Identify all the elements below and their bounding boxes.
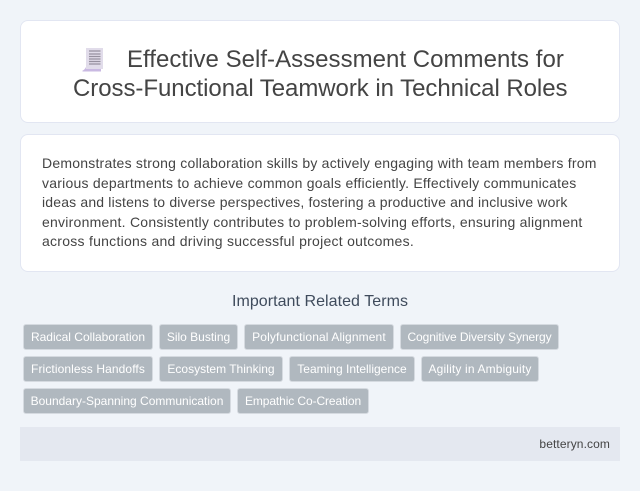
panel: description xyxy=(20,134,620,272)
tag: Ecosystem Thinking xyxy=(167,362,275,376)
tag xyxy=(23,356,153,382)
description text: various departments to achieve common goals efficiently. Effectively communicates xyxy=(42,174,577,190)
description text: Demonstrates strong collaboration skills by actively engaging with team members from xyxy=(42,155,597,171)
tag xyxy=(159,356,283,382)
description text: ideas and listens to diverse perspectives, fostering a productive and inclusive work xyxy=(42,194,568,210)
description text: across functions and driving successful project outcomes. xyxy=(42,233,414,249)
tag xyxy=(421,356,539,382)
tag: Agility in Ambiguity xyxy=(428,362,532,376)
heading: related terms: Important Related Terms xyxy=(232,293,408,310)
tag xyxy=(400,324,559,350)
tag: Boundary-Spanning Communication xyxy=(31,394,223,408)
tag: Radical Collaboration xyxy=(31,330,145,344)
tag: Empathic Co-Creation xyxy=(245,394,361,408)
footer bar xyxy=(20,427,620,461)
tag: Silo Busting xyxy=(167,330,230,344)
description text: environment. Consistently contributes to problem-solving efforts, ensuring alignment xyxy=(42,214,582,230)
tag: Teaming Intelligence xyxy=(297,362,407,376)
panel: header xyxy=(20,20,620,123)
icon: document scroll xyxy=(82,48,103,72)
tag: Polyfunctional Alignment xyxy=(252,330,386,344)
title: Cross-Functional Teamwork in Technical Roles xyxy=(73,75,567,102)
tag: Frictionless Handoffs xyxy=(31,362,145,376)
tag xyxy=(159,324,238,350)
tag xyxy=(23,324,153,350)
tag list xyxy=(23,324,559,414)
title xyxy=(73,46,567,102)
tag xyxy=(237,388,369,414)
tag xyxy=(244,324,394,350)
footer source text: betteryn.com xyxy=(539,437,610,451)
tag: Cognitive Diversity Synergy xyxy=(407,330,552,344)
tag xyxy=(289,356,415,382)
tag xyxy=(23,388,231,414)
title: Effective Self-Assessment Comments for xyxy=(127,46,564,73)
description text xyxy=(42,155,597,249)
